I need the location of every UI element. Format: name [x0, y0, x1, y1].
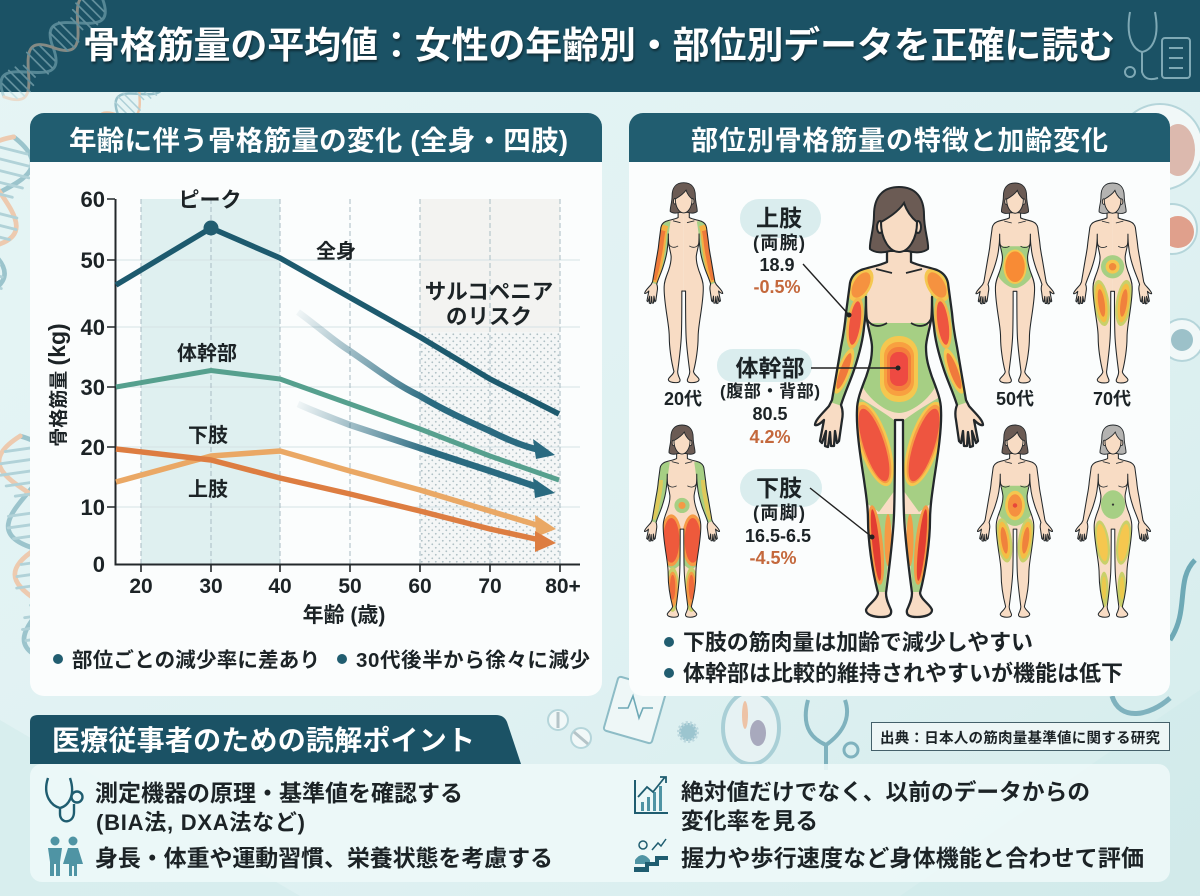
x axis labels: 70 [478, 575, 502, 598]
series labels: サルコペニア [425, 280, 553, 304]
region takeaways: 体幹部は比較的維持されやすいが機能は低下 [683, 661, 1123, 686]
age labels: 20代 [664, 389, 702, 409]
heading ribbon: 医療従事者のための読解ポイント [52, 725, 475, 756]
age labels [664, 389, 1131, 409]
axis title: y: 骨格筋量 (kg) [44, 323, 70, 447]
y axis labels: 40 [81, 315, 105, 340]
point: measuring device: 測定機器の原理・基準値を確認する [95, 780, 463, 806]
callout: upper limb: 上肢 [756, 205, 802, 231]
heading ribbon [30, 715, 521, 764]
age labels: 50代 [996, 389, 1034, 409]
callout: upper limb: -0.5% [753, 277, 801, 297]
callout: trunk: 体幹部 [736, 355, 804, 381]
x axis labels: 40 [268, 575, 292, 598]
figure: 70s upper [1074, 183, 1152, 383]
callout: upper limb [740, 199, 852, 318]
x axis labels: 20 [129, 575, 153, 598]
callout: upper limb: 18.9 [759, 255, 795, 275]
callout: trunk [717, 349, 900, 447]
icon: people [48, 836, 83, 876]
series labels [177, 189, 553, 501]
figure: 20s upper [645, 183, 723, 383]
icon: stethoscope [46, 778, 82, 821]
line: upper limb [116, 449, 556, 552]
line: lower limb [116, 451, 556, 537]
y axis labels: 10 [81, 495, 105, 520]
arrow: trunk projection [298, 404, 555, 498]
panel: age change chart [30, 113, 602, 696]
x axis labels: 30 [199, 575, 223, 598]
title icon: stethoscope and clipboard [1125, 12, 1190, 79]
series labels: 下肢 [188, 424, 228, 447]
panel: reading points [30, 715, 1170, 882]
x axis labels: 80+ [545, 575, 581, 598]
point: body and lifestyle: 身長・体重や運動習慣、栄養状態を考慮する [95, 845, 553, 871]
line: whole body [116, 228, 559, 414]
arrow: whole body projection [298, 312, 555, 459]
region takeaways [664, 630, 1123, 686]
callout: lower limb [740, 469, 874, 568]
chart takeaways: 30代後半から徐々に減少 [356, 648, 590, 672]
callout: trunk: (腹部・背部) [720, 381, 820, 401]
x axis labels: 50 [338, 575, 362, 598]
series labels: 全身 [316, 240, 356, 263]
point: rate of change: 絶対値だけでなく、以前のデータからの [681, 779, 1090, 805]
source note: 出典：日本人の筋肉量基準値に関する研究 [880, 729, 1160, 747]
panel heading: chart: 年齢に伴う骨格筋量の変化 (全身・四肢) [69, 125, 568, 156]
figure: central heat map body [815, 187, 983, 617]
point: rate of change [681, 779, 1090, 834]
callout: trunk: 4.2% [749, 427, 791, 447]
figure: mid upper [644, 425, 720, 617]
series labels: ピーク [178, 189, 242, 212]
icon: steps and person [634, 839, 668, 872]
series labels: のリスク [446, 305, 532, 329]
chart: muscle mass by age [44, 187, 581, 627]
y axis labels: 20 [81, 435, 105, 460]
callout: trunk: 80.5 [752, 404, 788, 424]
y axis labels: 50 [81, 248, 105, 273]
figure: 50s upper [976, 183, 1054, 383]
series labels: 体幹部 [177, 342, 237, 365]
point: measuring device: (BIA法, DXA法など) [96, 810, 305, 835]
point: measuring device [95, 780, 463, 835]
y axis labels: 60 [81, 187, 105, 212]
region takeaways: 下肢の筋肉量は加齢で減少しやすい [683, 630, 1033, 655]
title banner [0, 0, 1200, 107]
panel: body regions [629, 113, 1170, 696]
line: trunk [116, 370, 559, 480]
axis title: x: 年齢 (歳) [303, 604, 385, 627]
x axis labels: 60 [408, 575, 432, 598]
y axis labels: 30 [81, 375, 105, 400]
title banner: 骨格筋量の平均値：女性の年齢別・部位別データを正確に読む [83, 24, 1115, 66]
point: rate of change: 変化率を見る [681, 808, 818, 834]
figure: 50s lower [977, 425, 1053, 617]
chart takeaways: 部位ごとの減少率に差あり [72, 648, 320, 672]
chart takeaways [53, 648, 590, 672]
callout: lower limb: -4.5% [749, 548, 797, 568]
icon: trend chart [635, 777, 668, 813]
age labels: 70代 [1093, 389, 1131, 409]
callout: upper limb: (両腕) [753, 233, 805, 253]
callout: lower limb: (両脚) [753, 503, 805, 523]
source note [872, 722, 1170, 750]
callout: lower limb: 16.5-6.5 [745, 526, 811, 546]
figure: 70s lower [1075, 425, 1151, 617]
series labels: 上肢 [188, 478, 228, 501]
panel heading: regions: 部位別骨格筋量の特徴と加齢変化 [691, 126, 1108, 156]
callout: lower limb: 下肢 [756, 475, 802, 501]
y axis labels [81, 187, 105, 577]
peak marker [204, 220, 218, 236]
y axis labels: 0 [93, 552, 105, 577]
x axis labels [129, 575, 581, 598]
point: physical function: 握力や歩行速度など身体機能と合わせて評価 [681, 845, 1144, 871]
